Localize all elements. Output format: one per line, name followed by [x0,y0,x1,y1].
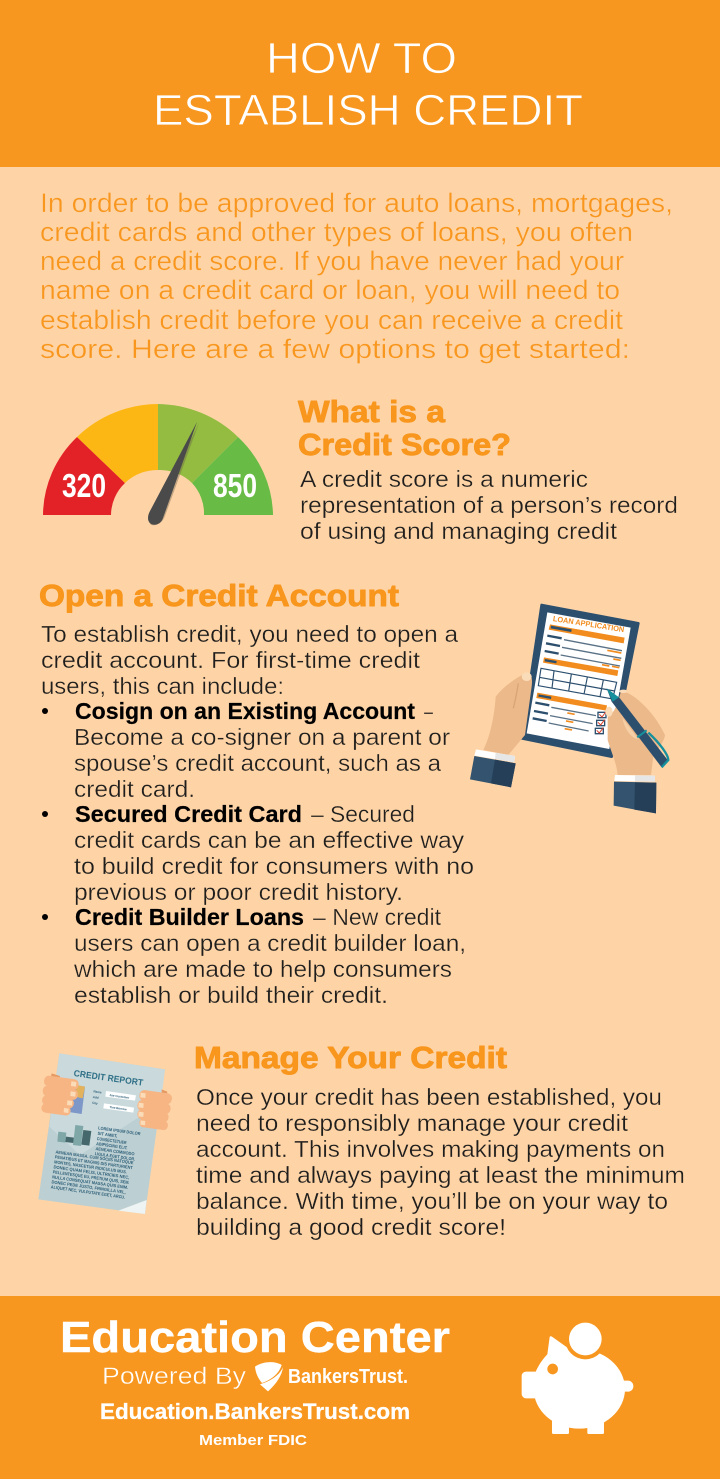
left hand [41,1073,79,1116]
manage credit text: balance. With time, you’ll be on your way to [196,1188,668,1214]
icon: credit report: PELLENTESQUE EU, PRETIUM QUIS, SEM. [53,1169,130,1185]
icon: credit report: AENEAN COMMODO [95,1146,135,1157]
title: ESTABLISH CREDIT [153,86,583,135]
icon: credit report: AENEAN MASSA. CUM SOCIIS NATOQUE [55,1149,134,1165]
manage credit text: need to responsibly manage your credit [196,1110,629,1136]
header banner [0,0,720,167]
title: HOW TO [266,34,457,83]
manage credit text: account. This involves making payments on [196,1136,665,1162]
icon: credit report: Name [93,1089,102,1094]
bullet: cosign: credit card. [74,776,195,802]
manage credit text [196,1084,685,1240]
icon: loan application: LOAN APPLICATION [552,614,625,634]
bullet: builder loans: – New credit [313,904,442,930]
bullet: secured card: to build credit for consumers with no [74,853,474,879]
icon: loan application [470,605,668,813]
right hand [608,691,665,775]
manage credit text: time and always paying at least the minimum [196,1162,685,1188]
icon: credit report: ALIQUET NEC, VULPUTATE EGET, ARCU. [51,1184,125,1200]
bullet: builder loans: Credit Builder Loans [75,904,304,930]
right hand [137,1089,173,1131]
heading: open a credit account: Open a Credit Account [39,578,399,613]
bullet: builder loans [42,904,466,1008]
bullet: secured card: Secured Credit Card [75,801,302,827]
education center title: Education Center [60,1313,450,1362]
icon: credit report: MONTES, NASCETUR RIDICULUS MUS. [54,1159,127,1175]
bullet: builder loans: users can open a credit builder loan, [74,930,466,956]
bullet: cosign: – [424,698,433,724]
icon: piggy bank [522,1319,633,1434]
heading: manage your credit: Manage Your Credit [194,1040,507,1075]
intro paragraph [40,188,673,364]
icon: credit report: CREDIT REPORT [73,1068,144,1088]
bullet: cosign: spouse’s credit account, such as a [74,750,441,776]
powered by: Powered By [102,1363,246,1390]
intro paragraph: establish credit before you can receive a credit [40,305,624,335]
icon: credit report: NULLA CONSEQUAT MASSA QUIS ENIM. [52,1174,128,1190]
heading: what is a credit score [298,394,511,462]
intro paragraph: name on a credit card or loan, you will need to [40,275,620,305]
bankers trust wordmark: BankersTrust. [288,1366,408,1388]
manage credit text: Once your credit has been established, you [196,1084,662,1110]
icon: credit report: Tine Borrow [109,1105,128,1111]
title [153,34,583,135]
icon: credit report: ADIPISCING ELIT. [96,1141,128,1150]
credit score definition: representation of a person’s record [300,492,678,518]
intro paragraph: score. Here are a few options to get started: [40,334,630,364]
bullet: secured card: previous or poor credit history. [74,879,403,905]
intro paragraph: In order to be approved for auto loans, mortgages, [40,188,673,218]
open account intro text [41,621,458,699]
credit score gauge [43,404,273,525]
intro paragraph: credit cards and other types of loans, you often [40,217,633,247]
bullet: builder loans: establish or build their credit. [74,982,388,1008]
website: Education.BankersTrust.com [100,1399,410,1424]
member fdic: Member FDIC [199,1432,307,1449]
open account intro text: To establish credit, you need to open a [41,621,458,647]
bullet: cosign: Cosign on an Existing Account [75,698,415,724]
heading: what is a credit score: What is a [298,394,446,429]
icon: credit report: LOREM IPSUM DOLOR [98,1125,142,1136]
intro paragraph: need a credit score. If you have never had your [40,246,624,276]
credit score definition [300,466,678,544]
heading: what is a credit score: Credit Score? [298,427,511,462]
right cuff [614,775,655,782]
needle shadow [150,423,199,525]
gauge label 850: 850 [213,467,257,504]
credit score definition: A credit score is a numeric [300,466,588,492]
icon: credit report: DONEC PEDE JUSTO, FRINGILLA VEL, [51,1179,126,1195]
bullet: secured card [42,801,474,905]
icon: credit report: LIGULA EGET DOLOR. [95,1151,135,1162]
left cuff [474,749,515,762]
bullet: secured card: – Secured [311,801,415,827]
icon: credit report: Joe Customer [109,1093,130,1100]
icon: credit report: PENATIBUS ET MAGNIS DIS PARTURIENT [55,1154,133,1170]
manage credit text: building a good credit score! [196,1214,506,1240]
icon: credit report: SIT AMET, [97,1131,118,1138]
icon: credit report: City [92,1101,98,1105]
gauge label 320: 320 [62,467,106,504]
icon: credit report [38,1053,173,1214]
open account intro text: credit account. For first-time credit [41,647,421,673]
pen [607,688,668,767]
bullet: cosign: Become a co-signer on a parent or [74,724,450,750]
icon: bankers trust shield [255,1362,283,1391]
credit score definition: of using and managing credit [300,518,618,544]
icon: credit report: Add [93,1095,99,1100]
bullet: builder loans: which are made to help consumers [73,956,452,982]
needle [148,422,197,525]
bullet: secured card: credit cards can be an effective way [74,827,465,853]
bullet: cosign [42,698,450,802]
left hand [483,673,532,755]
open account intro text: users, this can include: [41,673,284,699]
icon: credit report: DONEC QUAM FELIS, ULTRICIES NEC, [53,1164,130,1180]
footer banner [0,1296,720,1479]
icon: credit report: CONSECTETUER [97,1136,128,1145]
